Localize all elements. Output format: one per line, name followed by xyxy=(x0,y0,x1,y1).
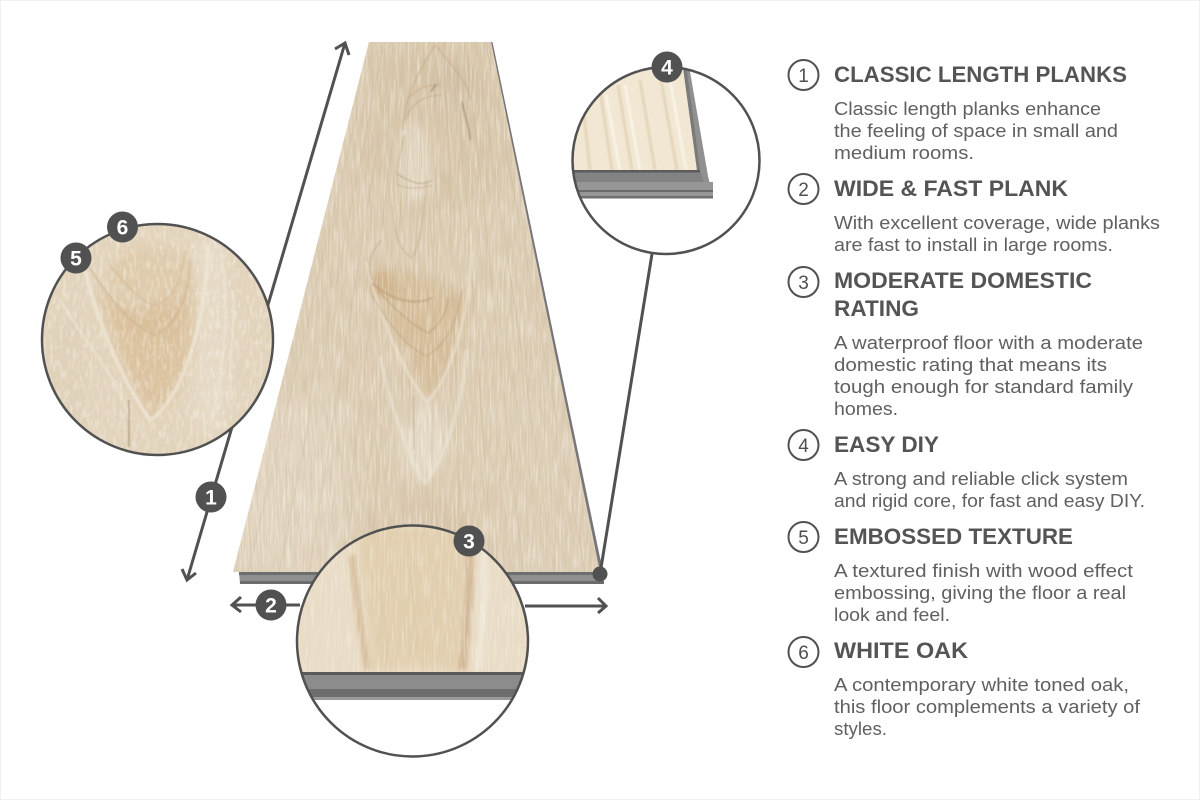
body 5 xyxy=(834,560,1133,625)
body 5: look and feel. xyxy=(834,604,950,625)
arrow 1: plank length xyxy=(182,43,349,580)
number 3: 3 xyxy=(798,273,809,294)
body 2 xyxy=(834,212,1160,255)
body 5: embossing, giving the floor a real xyxy=(834,582,1126,603)
arrow 2: plank width right xyxy=(525,598,606,613)
badge 4 xyxy=(652,52,682,82)
heading 5: EMBOSSED TEXTURE xyxy=(834,524,1073,549)
number 6 xyxy=(788,637,818,667)
body 1: medium rooms. xyxy=(834,142,974,163)
badge 5 xyxy=(60,242,92,274)
number 2 xyxy=(788,174,818,204)
body 6: A contemporary white toned oak, xyxy=(834,674,1129,695)
feature 1: classic length planks xyxy=(788,60,1127,163)
feature 6: white oak xyxy=(788,637,1141,739)
cross-section layers xyxy=(295,672,530,700)
number 2: 2 xyxy=(798,180,809,201)
plank side edge xyxy=(491,42,603,572)
number 1: 1 xyxy=(798,66,809,87)
badge 1: 1 xyxy=(205,486,217,510)
detail circle: plank cross-section xyxy=(295,520,530,756)
body 2: are fast to install in large rooms. xyxy=(834,234,1113,255)
badge 2: 2 xyxy=(265,594,277,618)
body 4 xyxy=(834,468,1145,511)
badge 5: 5 xyxy=(70,248,82,270)
body 1 xyxy=(834,98,1118,163)
badge 6 xyxy=(107,212,138,242)
wood cathedral grain xyxy=(366,45,472,483)
body 4: A strong and reliable click system xyxy=(834,468,1128,489)
feature 2: wide and fast plank xyxy=(788,174,1160,255)
body 3: homes. xyxy=(834,398,898,419)
feature 3: moderate domestic rating xyxy=(788,267,1143,419)
arrow 2: plank width left xyxy=(232,597,300,612)
number 1 xyxy=(788,60,818,90)
click joint profile xyxy=(574,70,713,198)
body 6: this floor complements a variety of xyxy=(834,696,1141,717)
heading 3: RATING xyxy=(834,296,919,321)
body 3 xyxy=(834,332,1143,419)
detail circle: click system corner xyxy=(560,60,760,254)
body 3: domestic rating that means its xyxy=(834,354,1107,375)
heading 4: EASY DIY xyxy=(834,432,939,457)
heading 2: WIDE & FAST PLANK xyxy=(834,176,1068,201)
heading 3 xyxy=(834,268,1092,321)
body 1: Classic length planks enhance xyxy=(834,98,1101,119)
body 1: the feeling of space in small and xyxy=(834,120,1118,141)
badge 2 xyxy=(256,590,286,620)
badge 6: 6 xyxy=(117,216,128,240)
body 3: tough enough for standard family xyxy=(834,376,1134,397)
feature 4: easy DIY xyxy=(788,430,1145,511)
body 6 xyxy=(834,674,1141,739)
badge 4: 4 xyxy=(661,56,673,80)
plank end edge xyxy=(239,572,604,584)
number 4: 4 xyxy=(798,436,809,457)
body 3: A waterproof floor with a moderate xyxy=(834,332,1143,353)
pointer dot xyxy=(592,566,608,582)
number 3 xyxy=(788,267,818,297)
number 4 xyxy=(788,430,818,460)
detail circle: embossed texture and white oak xyxy=(40,220,275,460)
plank wood face xyxy=(225,40,610,575)
body 2: With excellent coverage, wide planks xyxy=(834,212,1160,233)
heading 3: MODERATE DOMESTIC xyxy=(834,268,1092,293)
badge 3 xyxy=(454,526,484,556)
body 5: A textured finish with wood effect xyxy=(834,560,1133,581)
feature 5: embossed texture xyxy=(788,522,1133,625)
body 6: styles. xyxy=(834,718,887,739)
number 6: 6 xyxy=(798,643,809,664)
plank xyxy=(225,40,610,584)
heading 6: WHITE OAK xyxy=(834,638,968,663)
number 5 xyxy=(788,522,818,552)
badge 1 xyxy=(196,482,226,512)
line to detail 4 xyxy=(600,254,652,574)
body 4: and rigid core, for fast and easy DIY. xyxy=(834,490,1145,511)
heading 1: CLASSIC LENGTH PLANKS xyxy=(834,62,1127,87)
number 5: 5 xyxy=(798,528,809,549)
badge 3: 3 xyxy=(463,530,475,554)
